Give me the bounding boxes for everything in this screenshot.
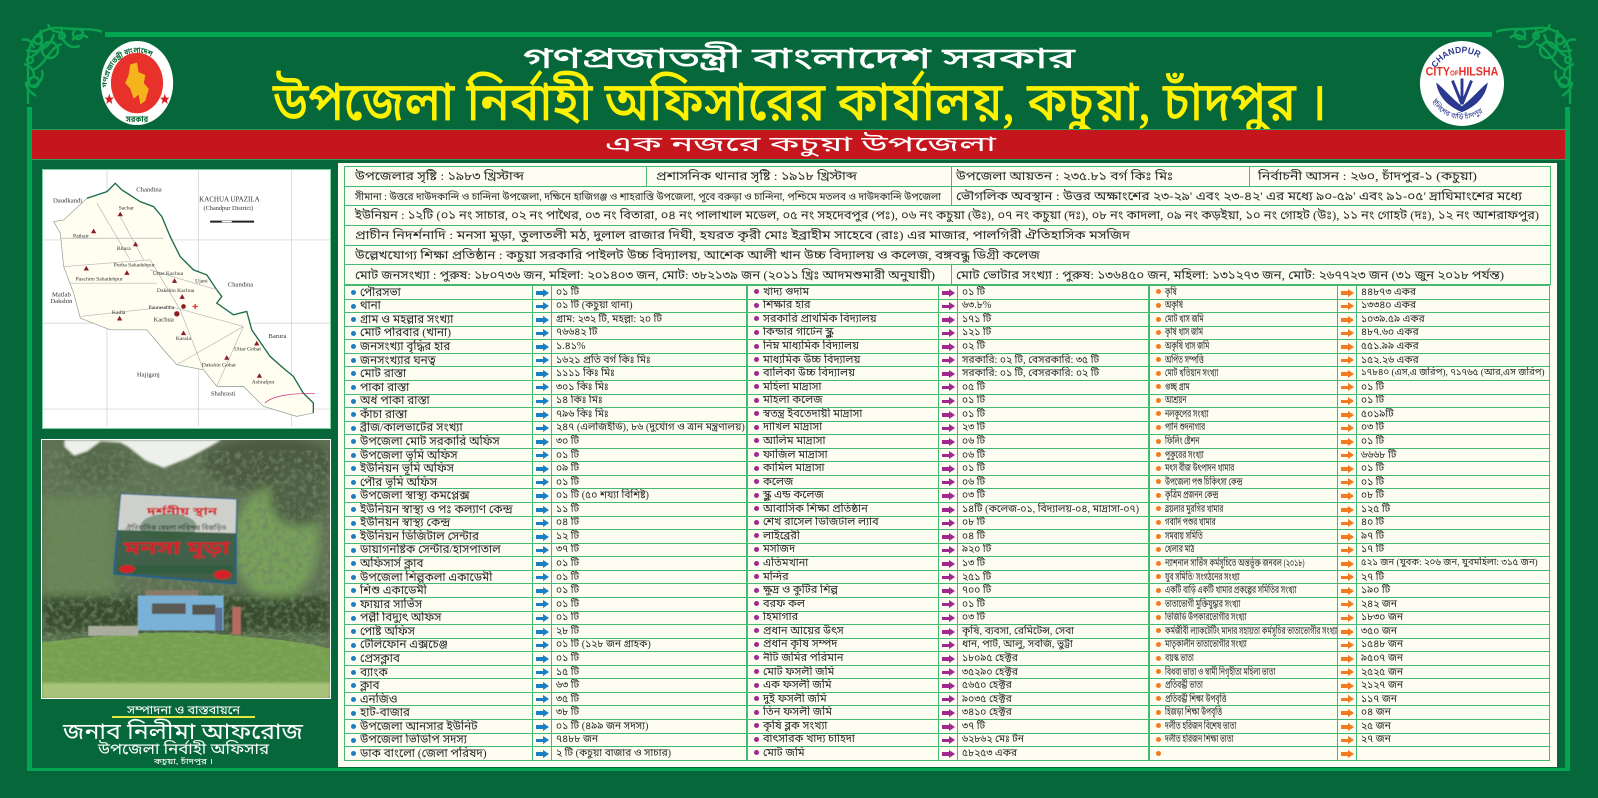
table: education, institutions and agriculture: ০৬ টি [962, 450, 985, 461]
text block: upazila overview rows: প্রশাসনিক থানার সৃষ্টি : ১৯১৮ খ্রিস্টাব্দ [656, 168, 857, 184]
table: land, welfare and allowances: কৃষি খাস জমি [1165, 327, 1203, 338]
panel: upazila map: Ashrafpur [252, 379, 275, 386]
table: land, welfare and allowances: দলীত হরিজন বিশেষ ভাতা [1165, 721, 1236, 732]
panel: upazila map: Chandina [136, 186, 162, 193]
icon: Chandpur city of Hilsha logo: CHANDPUR [1432, 46, 1480, 67]
table: administration and services: ০১ টি [556, 612, 579, 623]
table: administration and services: এনজিও [360, 693, 397, 706]
table: administration and services: প্রেসক্লাব [360, 652, 400, 665]
table: land, welfare and allowances: ৫২১ জন (যুবক: ২০৬ জন, যুবমহিলা: ৩১৫ জন) [1361, 558, 1538, 568]
panel: upazila map [43, 170, 330, 428]
table: administration and services: ০১ টি (কচুয়া থানা) [556, 300, 632, 311]
table: land, welfare and allowances: ২৪২ জন [1361, 599, 1397, 610]
icon: Chandpur city of Hilsha logo [1420, 41, 1504, 126]
table: land, welfare and allowances: ০১ টি [1361, 477, 1384, 488]
table: administration and services: অফিসার্স ক্লাব [360, 557, 423, 570]
icon: Chandpur city of Hilsha logo: CITYOFHILSHA [1426, 65, 1499, 79]
table: education, institutions and agriculture: ০১ টি [962, 599, 985, 610]
table: administration and services: ০১ টি [556, 653, 579, 664]
table: education, institutions and agriculture: শিক্ষার হার [763, 299, 810, 311]
table: land, welfare and allowances: ১৭৮৪০ (এস,এ জরিপ), ৭১৭৬৫ (আর,এস জরিপ) [1361, 368, 1545, 378]
table: land, welfare and allowances: উপজেলা পশু চিকিৎসা কেন্দ্র [1165, 477, 1243, 488]
panel: upazila map: Paurasabha [149, 305, 175, 311]
table: education, institutions and agriculture: এক ফসলী জমি [763, 679, 832, 691]
table: administration and services: ৩৫ টি [556, 694, 579, 705]
table: land, welfare and allowances: একটি বাড়ি একটি খামার প্রকল্পের সমিতির সংখ্যা [1165, 585, 1296, 596]
table: education, institutions and agriculture: ০৮ টি [962, 517, 985, 528]
table: education, institutions and agriculture: শেখ রাসেল ডিজিটাল ল্যাব [763, 516, 879, 528]
table: land, welfare and allowances: ২৫২৫ জন [1361, 667, 1403, 678]
table: education, institutions and agriculture: ০১ টি [962, 395, 985, 406]
table: land, welfare and allowances: ফিলিং ষ্টেশন [1165, 436, 1199, 447]
table: administration and services: উপজেলা আনসার ইউনিট [360, 720, 478, 733]
text block: upazila overview rows: উপজেলা আয়তন : ২৩৫.৮১ বর্গ কিঃ মিঃ [955, 168, 1173, 183]
table: education, institutions and agriculture: ১৪টি (কলেজ-০১, বিদ্যালয়-০৪, মাদ্রাসা-০৭) [962, 504, 1139, 515]
text block: upazila overview rows: মোট জনসংখ্যা : পুরুষ: ১৮০৭৩৬ জন, মহিলা: ২০১৪০৩ জন, মোট: ৩৮২১৩৯ জন (২০১১ খ্রিঃ আদমশুমারী অনুযায়ী) [355, 267, 935, 283]
panel: upazila map: Chandina [228, 282, 253, 289]
table: land, welfare and allowances: প্রতিবন্ধী ভাতা [1165, 680, 1203, 691]
table: administration and services: গ্রাম ও মহল্লার সংখ্যা [360, 313, 453, 326]
icon: government seal: গণপ্রজাতন্ত্রী বাংলাদেশ [102, 47, 153, 88]
table: administration and services: ০৯ টি [556, 463, 579, 474]
table: administration and services: শিশু একাডেমী [360, 584, 427, 597]
table: land, welfare and allowances: ৫৫১.৯৯ একর [1361, 341, 1419, 352]
panel: upazila map: Hajiganj [137, 371, 160, 378]
text block: upazila overview rows: উপজেলার সৃষ্টি : ১৯৮৩ খ্রিস্টাব্দ [354, 168, 524, 184]
table: education, institutions and agriculture: বালিকা উচ্চ বিদ্যালয় [763, 367, 855, 379]
table: education, institutions and agriculture: সরকারি: ০২ টি, বেসরকারি: ৩৫ টি [962, 355, 1099, 366]
title: government line: গণপ্রজাতন্ত্রী বাংলাদেশ সরকার [523, 42, 1076, 75]
table: education, institutions and agriculture: ০১ টি [962, 287, 985, 298]
table: education, institutions and agriculture: ১৩ টি [962, 558, 985, 569]
text block: implemented by: সম্পাদনা ও বাস্তবায়নে [126, 703, 241, 717]
table: education, institutions and agriculture: মোট জমি [763, 747, 805, 759]
table: administration and services: ০৪ টি [556, 517, 579, 528]
table: education, institutions and agriculture: নীট জমির পরিমান [763, 652, 843, 664]
table: administration and services: ০১ টি [556, 585, 579, 596]
table: administration and services: ০১ টি [556, 558, 579, 569]
table: land, welfare and allowances: ১২৫ টি [1361, 504, 1390, 515]
table: administration and services: ০১ টি (৪৯৯ জন সদস্য) [556, 721, 648, 732]
table: administration and services: ডাক বাংলো (জেলা পরিষদ) [360, 747, 487, 760]
table: land, welfare and allowances: ন্যাশনাল সার্ভিস কর্মসূচিতে অন্তর্ভূক্ত জনবল (২০১৮) [1165, 558, 1305, 569]
table: administration and services: পৌর ভূমি অফিস [360, 476, 437, 489]
table: administration and services: ১১১১ কিঃ মিঃ [556, 368, 615, 379]
table: education, institutions and agriculture: ৬২৮৬২ মেঃ টন [962, 734, 1024, 745]
table: administration and services: ব্রীজ/কালভার্টের সংখ্যা [360, 421, 463, 434]
panel: Manasa Mura photo: মনসা মূড়া [122, 538, 231, 559]
table: education, institutions and agriculture: ২৫১ টি [962, 572, 991, 583]
text block: upazila overview rows: ইউনিয়ন : ১২টি (০১ নং সাচার, ০২ নং পাথৈর, ০৩ নং বিতারা, ০৪ নং পালাখাল মডেল, ০৫ নং সহদেবপুর (পঃ), ০৬ নং কচুয়া (উঃ), ০৭ নং কচুয়া (দঃ), ০৮ নং কাদলা, ০৯ নং কড়ইয়া, ১০ নং গোহট (উঃ), ১১ নং গোহট (দঃ), ১২ নং আশরাফপুর) [354, 207, 1539, 224]
panel: upazila map: Kadla [112, 310, 126, 316]
table: education, institutions and agriculture: ০১ টি [962, 463, 985, 474]
table: education, institutions and agriculture: ৩৪১০ হেক্টর [962, 707, 1012, 718]
table: administration and services: গ্রাম: ২৩২ টি, মহল্লা: ২০ টি [556, 314, 662, 325]
table: education, institutions and agriculture: ০৩ টি [962, 490, 985, 501]
table: land, welfare and allowances: ১৯০ টি [1361, 585, 1390, 596]
heading band: at a glance [32, 129, 1565, 160]
table: administration and services: ৭৪৮৮ জন [556, 734, 598, 745]
panel: upazila map: Matlab [52, 292, 71, 299]
table: education, institutions and agriculture: ৫৬৫০ হেক্টর [962, 680, 1012, 691]
panel: upazila map: Uttar Kachua [153, 271, 184, 277]
table: land, welfare and allowances [1149, 285, 1550, 761]
panel: upazila map: Shahrasti [211, 390, 236, 397]
table: land, welfare and allowances: অর্পিত সম্পত্তি [1165, 355, 1204, 366]
table: land, welfare and allowances: ২৭ জন [1361, 734, 1391, 745]
table: administration and services: পাকা রাস্তা [360, 381, 409, 394]
table: land, welfare and allowances: কৃত্রিম প্রজনন কেন্দ্র [1165, 490, 1218, 501]
table: administration and services: জনসংখ্যা বৃদ্ধির হার [360, 340, 450, 353]
table: education, institutions and agriculture: ৬৩.৮% [962, 300, 991, 311]
table: land, welfare and allowances: ০১ টি [1361, 382, 1384, 393]
panel: upazila map: Kachua [154, 316, 174, 323]
table: administration and services: ১৬২১ প্রতি বর্গ কিঃ মিঃ [556, 355, 650, 366]
panel: upazila map: Sachar [119, 206, 134, 212]
panel: upazila map: KACHUA UPAZILA [199, 195, 260, 203]
table: education, institutions and agriculture: ক্ষুদ্র ও কুটির শিল্প [763, 584, 838, 596]
table: administration and services: উপজেলা মোট সরকারি অফিস [360, 435, 500, 448]
table: land, welfare and allowances: ০১ টি [1361, 436, 1384, 447]
icon: Chandpur city of Hilsha logo: ইলিশের বাড়ি চাঁদপুর [1432, 98, 1482, 120]
table: land, welfare and allowances: ৯৫০৭ জন [1361, 653, 1403, 664]
text block: implemented by: উপজেলা নির্বাহী অফিসার [97, 740, 270, 758]
table: education, institutions and agriculture: ফাজিল মাদ্রাসা [763, 449, 828, 461]
panel: upazila map: Dakshin Gohat [202, 362, 236, 368]
table: education, institutions and agriculture: প্রধান কৃষি সম্পদ [763, 638, 837, 650]
table: land, welfare and allowances: পানি শুদনাগার [1165, 422, 1205, 433]
table: education, institutions and agriculture: হিমাগার [763, 611, 798, 623]
table: land, welfare and allowances: বিধবা ভাতা ও স্বামী নিগৃহীতা মহিলা ভাতা [1165, 667, 1275, 678]
table: education, institutions and agriculture: ১৮০৯৫ হেক্টর [962, 653, 1018, 664]
table: administration and services: ০১ টি [556, 477, 579, 488]
table: land, welfare and allowances: প্রতিবন্ধী শিক্ষা উপবৃত্তি [1165, 694, 1226, 705]
table: land, welfare and allowances: ৪৪৮৭৩ একর [1361, 287, 1416, 298]
panel: Manasa Mura photo: ঐতিহাসিক বেহুলা লখিন্দর বিজড়িত [125, 523, 227, 532]
table: land, welfare and allowances: মোট খাস জমি [1165, 314, 1204, 325]
table: land, welfare and allowances: ৬৬৬৮ টি [1361, 450, 1396, 461]
table: land, welfare and allowances: দলীত হরিজন শিক্ষা ভাতা [1165, 734, 1233, 745]
table: administration and services: পৌরসভা [360, 286, 401, 299]
table: administration and services: ২৮ টি [556, 626, 579, 637]
table: education, institutions and agriculture: ০২ টি [962, 341, 985, 352]
table: administration and services: উপজেলা ভূমি অফিস [360, 449, 458, 462]
table: administration and services: ২৪৭ (এলজিইডি), ৮৬ (দুর্যোগ ও ত্রান মন্ত্রণালয়) [556, 422, 745, 433]
table: education, institutions and agriculture: দাখিল মাদ্রাসা [763, 421, 822, 433]
table: administration and services: ৭৯৬ কিঃ মিঃ [556, 409, 609, 420]
table: education, institutions and agriculture: ৩৭ টি [962, 721, 985, 732]
table: land, welfare and allowances: ২৫ জন [1361, 721, 1391, 732]
icon: right corner ornament [1496, 24, 1576, 104]
table: administration and services: উপজেলা ভিডিপি সদস্য [360, 733, 467, 746]
table: education, institutions and agriculture: ৯০৩৫ হেক্টর [962, 694, 1012, 705]
table: administration and services: পোষ্ট অফিস [360, 625, 415, 638]
table: administration and services: ০১ টি [556, 450, 579, 461]
panel: upazila map: Dakshin Kachua [157, 288, 195, 294]
table: education, institutions and agriculture: ০৩ টি [962, 612, 985, 623]
table: administration and services: ১৪ কিঃ মিঃ [556, 395, 602, 406]
table: land, welfare and allowances: ১৭ টি [1361, 544, 1384, 555]
text block: implemented by [62, 703, 304, 765]
table: administration and services: ইউনিয়ন স্বাস্থ্য কেন্দ্র [360, 516, 450, 529]
text block: upazila overview rows: ভৌগলিক অবস্থান : উত্তর অক্ষাংশের ২৩-২৯' এবং ২৩-৪২' এর মধ্যে ৯০-৫৯' এবং ৯১-০৫' দ্রাঘিমাংশের মধ্যে [956, 188, 1523, 203]
table: education, institutions and agriculture: স্কুল এন্ড কলেজ [763, 489, 824, 501]
table: land, welfare and allowances: ৩৫০ জন [1361, 626, 1397, 637]
table: education, institutions and agriculture: মহিলা মাদ্রাসা [763, 381, 821, 393]
table: education, institutions and agriculture [747, 285, 1149, 761]
table: education, institutions and agriculture: ৭০০ টি [962, 585, 991, 596]
heading band: at a glance: এক নজরে কচুয়া উপজেলা [605, 132, 997, 157]
table: education, institutions and agriculture: কিন্ডার গার্টেন স্কুল [763, 326, 833, 338]
table: administration and services: কাঁচা রাস্তা [360, 408, 407, 421]
table: education, institutions and agriculture: সরকারি: ০১ টি, বেসরকারি: ০২ টি [962, 368, 1099, 379]
table: education, institutions and agriculture: এতিমখানা [763, 557, 808, 569]
panel: upazila map: Purba Sahadebpur [114, 263, 155, 269]
panel: upazila map: Barura [268, 333, 287, 340]
panel: Manasa Mura photo: দর্শনীয় স্থান [146, 504, 218, 518]
table: administration and services: ১১ টি [556, 504, 579, 515]
table: land, welfare and allowances: ১৮৩০ জন [1361, 612, 1403, 623]
table: administration and services: জনসংখ্যার ঘনত্ব [360, 354, 436, 367]
panel: upazila map: Bitara [117, 246, 131, 252]
text block: implemented by: জনাব নিলীমা আফরোজ [62, 719, 304, 744]
table: administration and services: ফায়ার সার্ভিস [360, 598, 422, 611]
table: education, institutions and agriculture: ধান, পাট, আলু, সবজি, ভুট্টা [962, 639, 1073, 650]
panel: upazila map: Daudkandi [53, 198, 82, 205]
table: education, institutions and agriculture: আবাসিক শিক্ষা প্রতিষ্ঠান [763, 503, 868, 515]
table: land, welfare and allowances: ভিজিডি উপকারভোগীর সংখ্যা [1165, 612, 1247, 623]
text block: upazila overview rows: উল্লেখযোগ্য শিক্ষা প্রতিষ্ঠান : কচুয়া সরকারি পাইলট উচ্চ বিদ্যালয়, আশেক আলী খান উচ্চ বিদ্যালয় ও কলেজ, বঙ্গবন্ধু ডিগ্রী কলেজ [354, 246, 1041, 264]
table: education, institutions and agriculture: ১২১ টি [962, 327, 991, 338]
table: land, welfare and allowances: ০১ টি [1361, 395, 1384, 406]
table: land, welfare and allowances: খেলার মাঠ [1165, 544, 1194, 555]
table: education, institutions and agriculture: ২৩ টি [962, 422, 985, 433]
table: administration and services: ১৫ টি [556, 667, 579, 678]
table: education, institutions and agriculture: ৩৫২৯০ হেক্টর [962, 667, 1018, 678]
text block: upazila overview rows: প্রাচীন নিদর্শনাদি : মনসা মুড়া, তুলাতলী মঠ, দুলাল রাজার দিঘী, হযরত কৃরী মোঃ ইব্রাহীম সাহেবে (রাঃ) এর মাজার, পালগিরী ঐতিহাসিক মসজিদ [355, 227, 1130, 243]
table: education, institutions and agriculture: দুই ফসলী জমি [763, 693, 827, 705]
table: education, institutions and agriculture: বাৎসরিক খাদ্য চাহিদা [763, 733, 855, 745]
table: administration and services: মোট রাস্তা [360, 367, 406, 380]
table: administration and services: ৭৬৬৪২ টি [556, 327, 597, 338]
table: land, welfare and allowances: আশ্রয়ন [1165, 395, 1187, 406]
table: land, welfare and allowances: ০১ টি [1361, 463, 1384, 474]
table: land, welfare and allowances: ০৩ টি [1361, 422, 1384, 433]
table: land, welfare and allowances: মাতৃকালীন ভাতাভোগীর সংখ্যা [1165, 639, 1247, 650]
panel: upazila map: Dakshin [50, 298, 73, 305]
table: land, welfare and allowances: মোট খতিয়ান সংখ্যা [1165, 368, 1218, 379]
panel: cream data background [338, 163, 1557, 767]
table: land, welfare and allowances: ১৫৪৮ জন [1361, 639, 1403, 650]
table: land, welfare and allowances: কৃষি [1165, 287, 1177, 298]
table: administration and services: ৩৭ টি [556, 544, 579, 555]
table: education, institutions and agriculture: সরকারি প্রাথমিক বিদ্যালয় [763, 313, 877, 325]
table: land, welfare and allowances: ০৮ টি [1361, 490, 1384, 501]
table: education, institutions and agriculture: আলিম মাদ্রাসা [763, 435, 825, 447]
table: administration and services: ০১ টি [556, 572, 579, 583]
icon: government seal: সরকার [125, 115, 149, 124]
icon: left corner ornament [22, 24, 102, 104]
table: education, institutions and agriculture: ০৬ টি [962, 436, 985, 447]
table: land, welfare and allowances: ২১২৭ জন [1361, 680, 1403, 691]
panel: upazila map: Uttar Gohat [234, 346, 261, 352]
table: administration and services: ৬৩ টি [556, 680, 579, 691]
table: administration and services: ব্যাংক [360, 666, 388, 679]
table: land, welfare and allowances: ৫০১৯টি [1361, 409, 1394, 420]
table: land, welfare and allowances: ২৭ টি [1361, 572, 1384, 583]
table: land, welfare and allowances: যুব সমিতি/ সংগঠনের সংখ্যা [1165, 572, 1240, 583]
table: education, institutions and agriculture: মহিলা কলেজ [763, 394, 823, 406]
table: administration and services: ০১ টি [556, 599, 579, 610]
table: land, welfare and allowances: বয়স্ক ভাতা [1165, 653, 1194, 664]
table: education, institutions and agriculture: ৫৮২৫৩ একর [962, 748, 1017, 759]
table: administration and services: উপজেলা স্বাস্থ্য কমপ্লেক্স [360, 489, 470, 502]
table: land, welfare and allowances: ৪৮৭.৬০ একর [1361, 327, 1419, 338]
table: education, institutions and agriculture: মন্দির [763, 571, 789, 583]
table: education, institutions and agriculture: তিন ফসলী জমি [763, 706, 832, 718]
table: land, welfare and allowances: ১৩৩৪০ একর [1361, 300, 1416, 311]
table: education, institutions and agriculture: কামিল মাদ্রাসা [763, 462, 824, 474]
table: land, welfare and allowances: ভাতাভোগী মুক্তিযুদ্ধার সংখ্যা [1165, 599, 1240, 610]
table: education, institutions and agriculture: মাধ্যমিক উচ্চ বিদ্যালয় [763, 354, 860, 366]
table: education, institutions and agriculture: কলেজ [763, 476, 793, 488]
table: land, welfare and allowances: নলকূপের সংখ্যা [1165, 409, 1209, 420]
table: administration and services: ২ টি (কচুয়া বাজার ও সাচার) [556, 748, 671, 759]
text block: upazila overview rows: নির্বাচনী আসন : ২৬০, চাঁদপুর-১ (কচুয়া) [1257, 168, 1477, 185]
table: education, institutions and agriculture: খাদ্য গুদাম [763, 286, 809, 298]
table: administration and services: ইউনিয়ন ডিজিটাল সেন্টার [360, 530, 479, 543]
table: administration and services: ০১ টি (১২৮ জন গ্রাহক) [556, 639, 651, 650]
table: administration and services: পল্লী বিদ্যুৎ অফিস [360, 611, 441, 624]
table: land, welfare and allowances: ৯৭ টি [1361, 531, 1384, 542]
table: education, institutions and agriculture: মোট ফসলী জমি [763, 666, 834, 678]
table: administration and services: হাট-বাজার [360, 706, 410, 719]
table: land, welfare and allowances: ৪০ টি [1361, 517, 1384, 528]
table: education, institutions and agriculture: ০৬ টি [962, 477, 985, 488]
table: education, institutions and agriculture: স্বতন্ত্র ইবতেদায়ী মাদ্রাসা [763, 408, 862, 420]
table: administration and services: অর্ধ পাকা রাস্তা [360, 394, 430, 407]
panel: upazila map: Paschim Sahadebpur [76, 277, 123, 283]
table: administration and services: ১২ টি [556, 531, 579, 542]
panel: upazila map: Karaia [176, 336, 191, 342]
table: administration and services: ০১ টি [556, 287, 579, 298]
table: land, welfare and allowances: ১১৭ জন [1361, 694, 1397, 705]
table: administration and services [344, 285, 747, 761]
icon: government seal [100, 41, 174, 125]
table: education, institutions and agriculture: মসজিদ [763, 543, 795, 555]
text block: upazila overview rows: সীমানা : উত্তরে দাউদকান্দি ও চান্দিনা উপজেলা, দক্ষিনে হাজিগঞ্জ ও শাহরাস্তি উপজেলা, পূবে বরুড়া ও চান্দিনা, পশ্চিমে মতলব ও দাউদকান্দি উপজেলা [354, 190, 941, 203]
table: administration and services: ০১ টি (৫০ শয্যা বিশিষ্ট) [556, 490, 649, 501]
table: land, welfare and allowances: কর্মজীবী ল্যাকটেটিং মাদার সহায়তা কর্মসূচির ভাতাভোগীর সংখ্যা [1165, 626, 1338, 637]
table: administration and services: ডায়াগনষ্টিক সেন্টার/হাসপাতাল [360, 543, 501, 556]
table: land, welfare and allowances: গবাদি পশুর খামার [1165, 517, 1216, 528]
table: land, welfare and allowances: হিজড়া শিক্ষা উপবৃত্তি [1165, 707, 1222, 718]
table: administration and services: ক্লাব [360, 679, 379, 692]
table: administration and services: ১.৪১% [556, 341, 585, 352]
table: education, institutions and agriculture: কৃষি, ব্যবসা, রেমিটেন্স, সেবা [962, 626, 1074, 637]
table: administration and services: ৩০১ কিঃ মিঃ [556, 382, 609, 393]
table: education, institutions and agriculture: বরফ কল [763, 598, 805, 610]
table: education, institutions and agriculture: প্রধান আয়ের উৎস [763, 625, 844, 637]
table: administration and services: থানা [360, 299, 381, 312]
table: administration and services: ইউনিয়ন স্বাস্থ্য ও পঃ কল্যাণ কেন্দ্র [360, 503, 513, 516]
table: land, welfare and allowances: গুচ্ছ গ্রাম [1165, 382, 1190, 393]
panel: upazila map: Pathair [73, 234, 89, 240]
table: education, institutions and agriculture: ১৭১ টি [962, 314, 991, 325]
table: administration and services: টেলিফোন এক্সচেঞ্জ [360, 638, 448, 651]
table: administration and services: ৩০ টি [556, 436, 579, 447]
table: education, institutions and agriculture: ৯২০ টি [962, 544, 991, 555]
text block: upazila overview rows: মোট ভোটার সংখ্যা : পুরুষ: ১৩৬৪৫০ জন, মহিলা: ১৩১২৭৩ জন, মোট: ২৬৭৭২৩ জন (৩১ জুন ২০১৮ পর্যন্ত) [956, 267, 1504, 283]
table: land, welfare and allowances: পুকুরের সংখ্যা [1165, 450, 1204, 461]
table: education, institutions and agriculture: লাইব্রেরী [763, 530, 800, 542]
table: land, welfare and allowances: মৎস বীজ উৎপাদন খামার [1165, 463, 1234, 474]
panel: upazila map: (Chandpur District) [203, 205, 253, 212]
table: land, welfare and allowances: ব্রয়লার মুরগির খামার [1165, 504, 1223, 515]
table: administration and services: ইউনিয়ন ভূমি অফিস [360, 462, 454, 475]
table: education, institutions and agriculture: কৃষি ব্লক সংখ্যা [763, 720, 827, 732]
table: administration and services: উপজেলা শিল্পকলা একাডেমী [360, 571, 492, 584]
text block: upazila overview rows [344, 166, 1551, 285]
table: education, institutions and agriculture: ০৫ টি [962, 382, 985, 393]
table: land, welfare and allowances: ১০৩৯.৫৯ একর [1361, 314, 1425, 325]
table: land, welfare and allowances: ১৫২.২৬ একর [1361, 355, 1419, 366]
table: education, institutions and agriculture: ০৪ টি [962, 531, 985, 542]
table: administration and services: মোট পরিবার (খানা) [360, 326, 451, 339]
panel: upazila map: Ujani [195, 279, 208, 285]
table: land, welfare and allowances: অকৃষি খাস জমি [1165, 341, 1209, 352]
panel: Manasa Mura photo [41, 439, 331, 699]
table: land, welfare and allowances: ০৪ জন [1361, 707, 1391, 718]
table: land, welfare and allowances: অকৃষি [1165, 300, 1183, 311]
table: land, welfare and allowances: সমবায় সমিতি [1165, 531, 1203, 542]
table: administration and services: ৩৮ টি [556, 707, 579, 718]
table: education, institutions and agriculture: ০১ টি [962, 409, 985, 420]
table: education, institutions and agriculture: নিম্ন মাধ্যমিক বিদ্যালয় [763, 340, 859, 352]
